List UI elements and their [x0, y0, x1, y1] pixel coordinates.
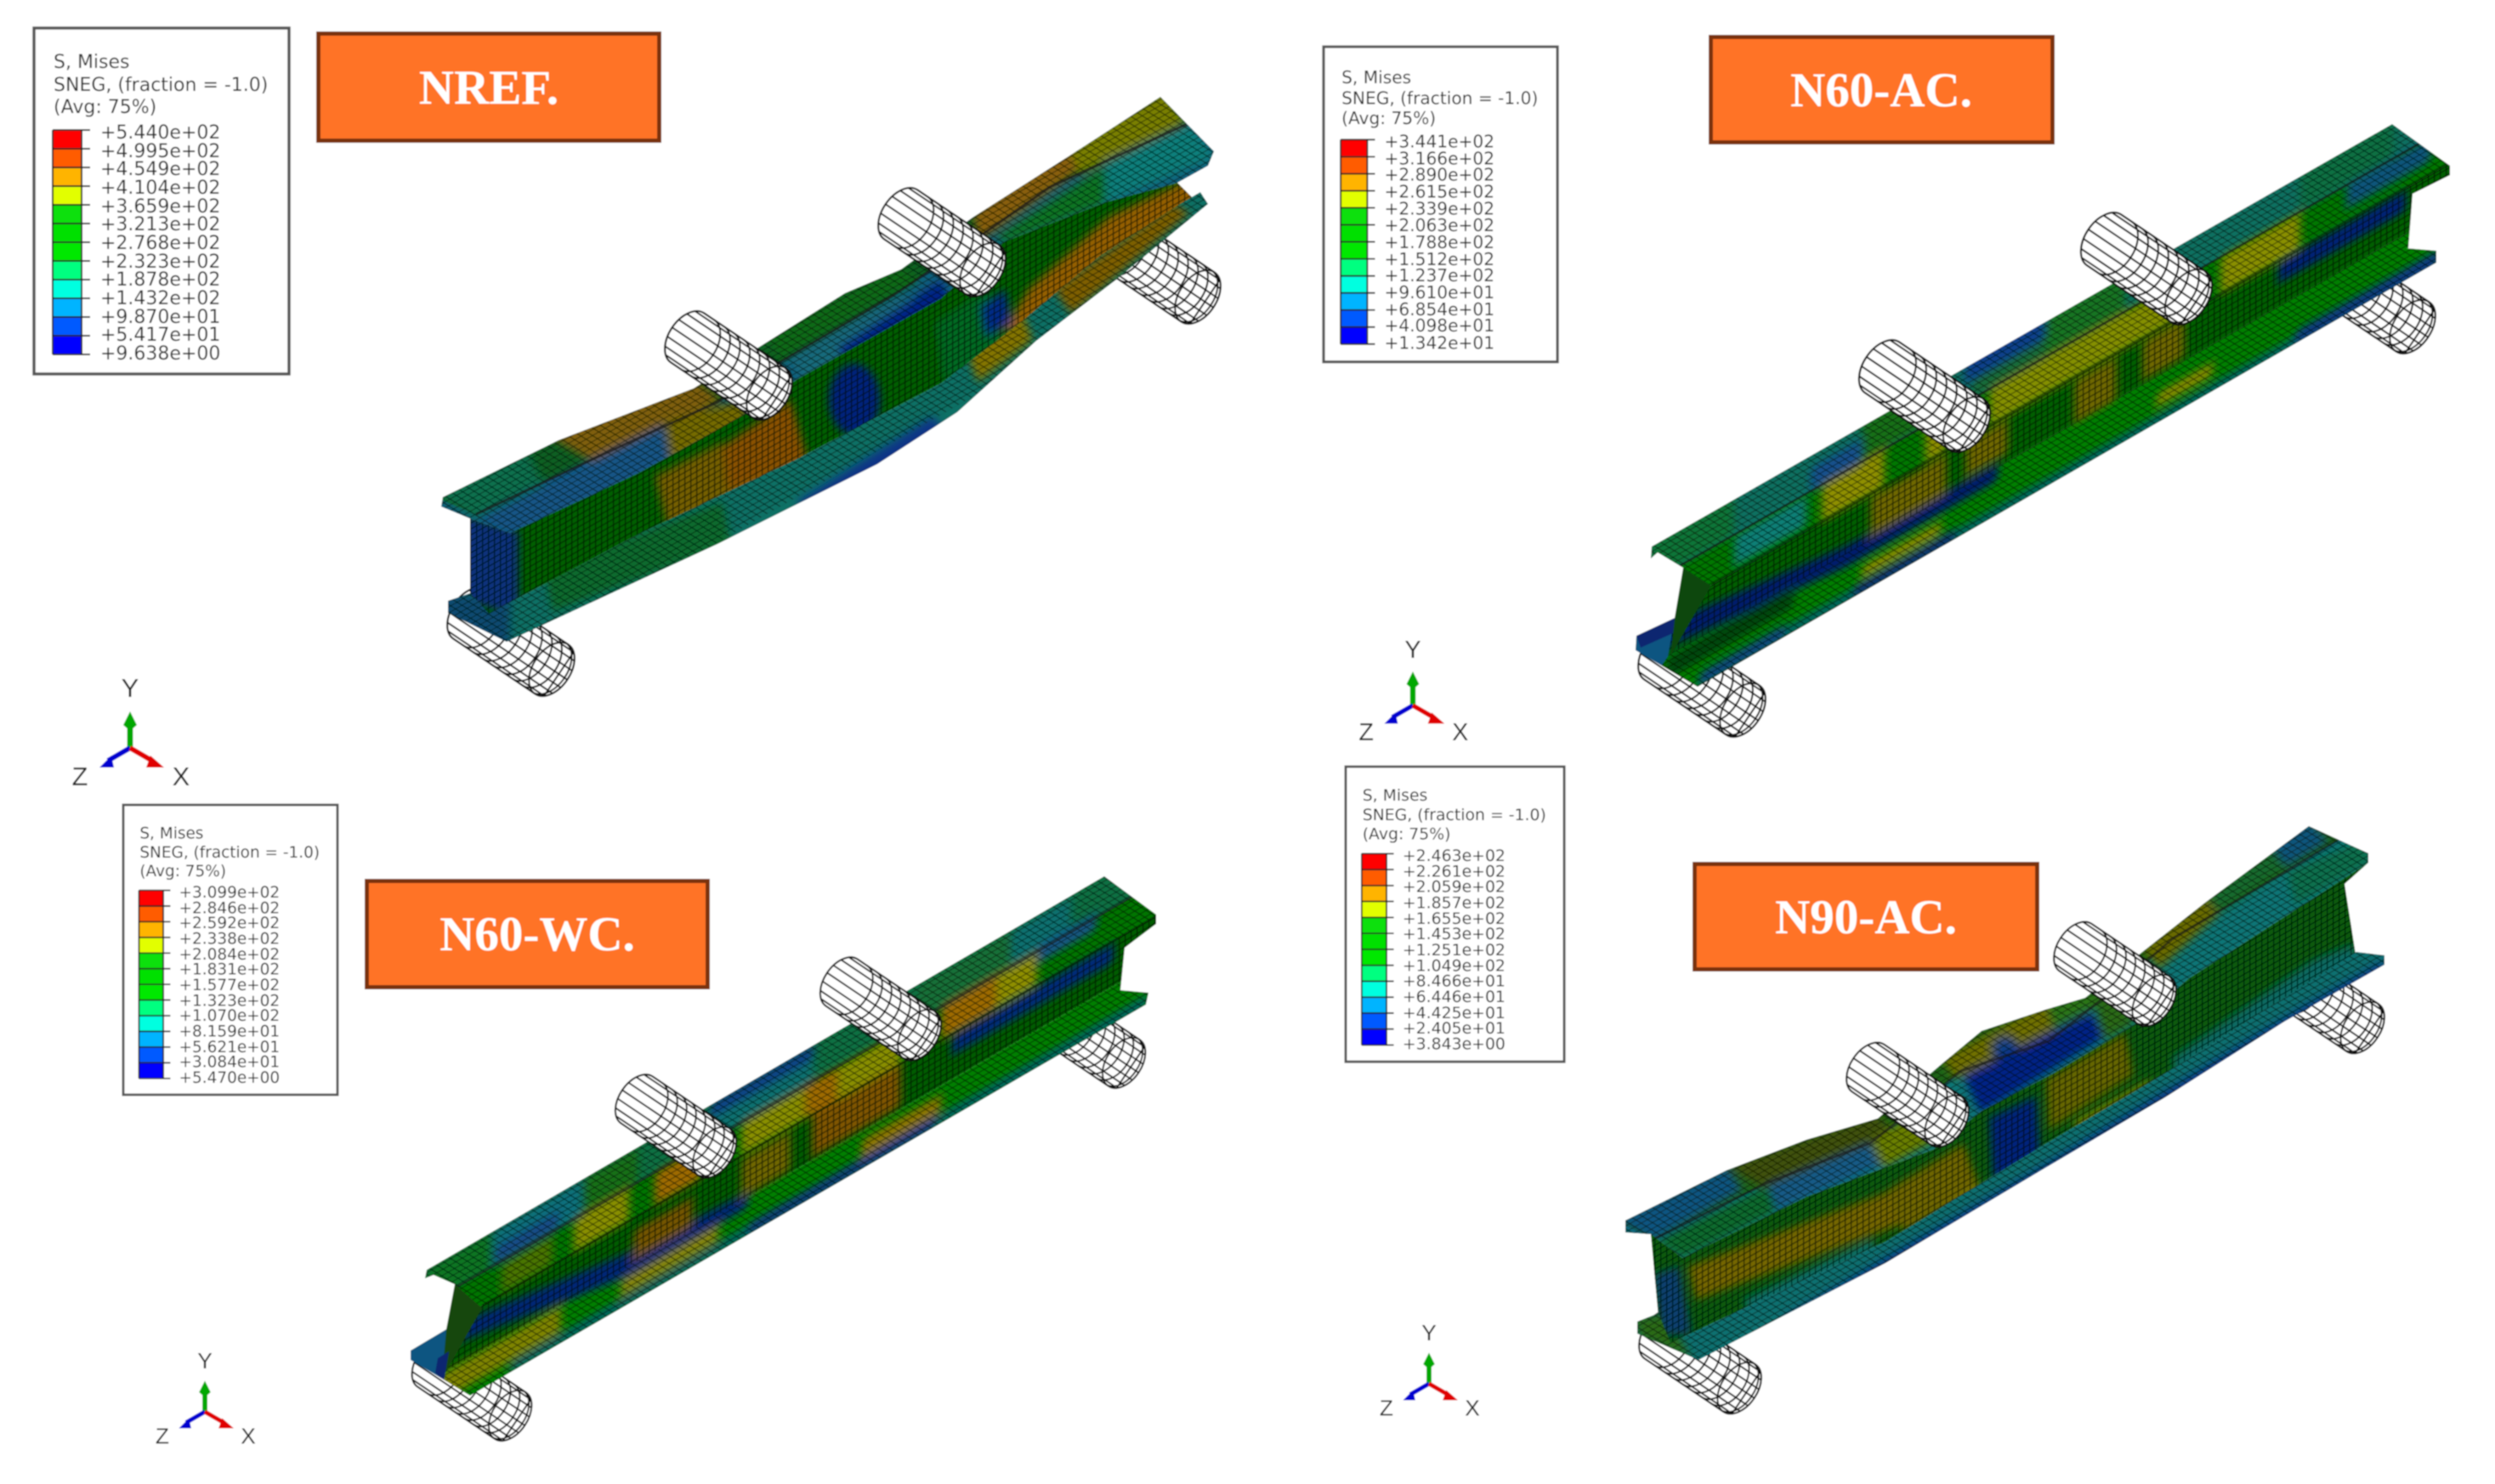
icon: rear support roller — [1017, 978, 1154, 1096]
legend: N60-AC: S, Mises — [1341, 67, 1411, 88]
legend: NREF: +9.638e+00 — [100, 343, 220, 365]
icon: axis triad: X — [1465, 1395, 1480, 1420]
label: N90-AC.: N90-AC. — [1775, 891, 1957, 944]
legend: N60-WC: +2.592e+02 — [179, 915, 280, 932]
icon: axis triad: Z — [156, 1423, 169, 1448]
legend: N90-AC: +1.251e+02 — [1403, 942, 1506, 960]
icon: axis triad: Y — [197, 1348, 213, 1374]
icon: axis triad — [156, 1348, 256, 1448]
legend: N60-WC: +1.070e+02 — [179, 1007, 280, 1025]
icon: axis triad: Z — [72, 762, 88, 791]
legend: N90-AC: +1.049e+02 — [1403, 958, 1506, 976]
legend: NREF — [34, 28, 289, 374]
icon: axis triad: Z — [1380, 1395, 1393, 1420]
legend: NREF: +3.213e+02 — [100, 214, 220, 235]
legend: N60-WC: +3.084e+01 — [179, 1053, 280, 1071]
panel: N90-AC — [1346, 756, 2397, 1424]
icon: load roller 1 — [1838, 1034, 1977, 1155]
beam: NREF stress contour — [440, 96, 1215, 643]
legend: N60-WC: (Avg: 75%) — [139, 863, 226, 881]
icon: load roller 2 — [2072, 204, 2221, 333]
legend: N60-WC: +3.099e+02 — [179, 884, 280, 902]
legend: N60-AC: +1.342e+01 — [1385, 332, 1494, 353]
legend: NREF: +4.104e+02 — [100, 178, 220, 199]
legend: N90-AC: S, Mises — [1363, 787, 1427, 805]
legend: N60-WC: S, Mises — [139, 824, 203, 842]
legend: NREF: +1.878e+02 — [100, 269, 220, 291]
icon: axis triad: X — [1452, 719, 1468, 746]
icon: front support roller — [403, 1331, 541, 1448]
legend: NREF: +4.995e+02 — [100, 141, 220, 162]
legend: N90-AC: +6.446e+01 — [1403, 988, 1506, 1006]
legend: N60-WC: +1.831e+02 — [179, 960, 280, 978]
beam: N60-AC stress contour — [1635, 123, 2451, 688]
legend: NREF: +3.659e+02 — [100, 196, 220, 218]
legend: N90-AC: +8.466e+01 — [1403, 972, 1506, 990]
icon: load roller 1 — [655, 303, 802, 428]
legend: N60-WC: +1.323e+02 — [179, 992, 280, 1010]
icon: axis triad — [1380, 1320, 1480, 1420]
legend: N60-AC: +1.512e+02 — [1385, 249, 1494, 269]
legend: N90-AC: +2.059e+02 — [1403, 879, 1506, 897]
legend: NREF: +5.440e+02 — [100, 122, 220, 144]
legend: N60-AC: +2.615e+02 — [1385, 182, 1494, 202]
beam: N60-WC stress contour — [410, 875, 1157, 1396]
icon: axis triad: X — [241, 1423, 256, 1448]
legend: N90-AC: +4.425e+01 — [1403, 1005, 1506, 1022]
legend: NREF: +2.768e+02 — [100, 233, 220, 254]
legend: N90-AC: +3.843e+00 — [1403, 1036, 1506, 1054]
beam: N90-AC stress contour — [1625, 825, 2385, 1361]
legend: N60-WC: +2.846e+02 — [179, 899, 280, 917]
icon: load roller 2 — [811, 949, 950, 1068]
label: NREF. — [318, 34, 660, 141]
legend: N90-AC: SNEG, (fraction = -1.0) — [1363, 807, 1546, 824]
legend: N60-AC: +1.237e+02 — [1385, 265, 1494, 286]
icon: front support roller — [1630, 1301, 1770, 1422]
panel: N60-AC — [1324, 37, 2465, 746]
legend: N60-AC: +2.890e+02 — [1385, 165, 1494, 185]
icon: axis triad — [72, 673, 190, 791]
legend: N60-WC: +2.338e+02 — [179, 930, 280, 948]
icon: axis triad: Z — [1358, 719, 1374, 746]
icon: axis triad: X — [173, 762, 190, 791]
legend: N60-AC: +2.339e+02 — [1385, 199, 1494, 219]
legend: NREF: (Avg: 75%) — [54, 97, 156, 118]
legend: N60-WC: +8.159e+01 — [179, 1022, 280, 1040]
legend: NREF: +4.549e+02 — [100, 159, 220, 180]
legend: N60-WC: +5.470e+00 — [179, 1069, 280, 1087]
legend: N90-AC: +1.655e+02 — [1403, 910, 1506, 928]
legend: N90-AC: (Avg: 75%) — [1363, 825, 1451, 843]
legend: N60-AC: +6.854e+01 — [1385, 299, 1494, 320]
legend: N60-AC: +9.610e+01 — [1385, 282, 1494, 303]
icon: rear support roller — [1084, 207, 1230, 332]
icon: axis triad: Y — [1421, 1320, 1437, 1345]
panel: N60-WC — [123, 805, 1165, 1448]
icon: rear support roller — [2254, 941, 2393, 1062]
icon: front support roller — [1629, 620, 1775, 745]
icon: load roller 1 — [1850, 331, 1999, 461]
label: N90-AC. — [1695, 864, 2037, 969]
legend: N60-WC: +1.577e+02 — [179, 977, 280, 994]
legend: N60-AC — [1324, 47, 1557, 362]
icon: load roller 2 — [2045, 914, 2185, 1034]
label: NREF.: NREF. — [419, 61, 559, 115]
icon: axis triad — [1358, 637, 1468, 746]
icon: front support roller — [438, 579, 584, 705]
label: N60-AC.: N60-AC. — [1790, 64, 1972, 117]
legend: N60-AC: +3.441e+02 — [1385, 131, 1494, 151]
legend: N60-AC: +3.166e+02 — [1385, 149, 1494, 168]
legend: N90-AC: +2.463e+02 — [1403, 847, 1506, 865]
legend: N90-AC — [1346, 767, 1564, 1062]
legend: NREF: SNEG, (fraction = -1.0) — [54, 75, 268, 96]
label: N60-AC. — [1710, 37, 2052, 143]
legend: N60-WC: +2.084e+02 — [179, 946, 280, 964]
label: N60-WC.: N60-WC. — [439, 908, 635, 961]
legend: NREF: +2.323e+02 — [100, 252, 220, 273]
legend: N90-AC: +2.405e+01 — [1403, 1020, 1506, 1038]
legend: N60-WC: +5.621e+01 — [179, 1039, 280, 1056]
icon: axis triad: Y — [1404, 637, 1421, 664]
icon: axis triad: Y — [122, 673, 139, 703]
legend: N60-AC: +2.063e+02 — [1385, 215, 1494, 235]
label: N60-WC. — [367, 881, 707, 988]
legend: NREF: +5.417e+01 — [100, 325, 220, 346]
legend: N60-AC: +1.788e+02 — [1385, 232, 1494, 252]
legend: NREF: +1.432e+02 — [100, 288, 220, 309]
legend: N60-AC: +4.098e+01 — [1385, 315, 1494, 336]
legend: N60-WC: SNEG, (fraction = -1.0) — [139, 844, 320, 862]
legend: N60-AC: SNEG, (fraction = -1.0) — [1341, 88, 1538, 108]
panel: NREF — [34, 28, 1230, 791]
legend: N60-AC: (Avg: 75%) — [1341, 108, 1436, 128]
icon: load roller 1 — [606, 1067, 746, 1186]
legend: NREF: S, Mises — [54, 52, 130, 73]
icon: load roller 2 — [869, 179, 1015, 305]
legend: NREF: +9.870e+01 — [100, 307, 220, 328]
legend: N90-AC: +1.857e+02 — [1403, 894, 1506, 912]
icon: rear support roller — [2299, 236, 2445, 362]
legend: N90-AC: +1.453e+02 — [1403, 926, 1506, 943]
legend: N90-AC: +2.261e+02 — [1403, 864, 1506, 881]
legend: N60-WC — [123, 805, 337, 1095]
